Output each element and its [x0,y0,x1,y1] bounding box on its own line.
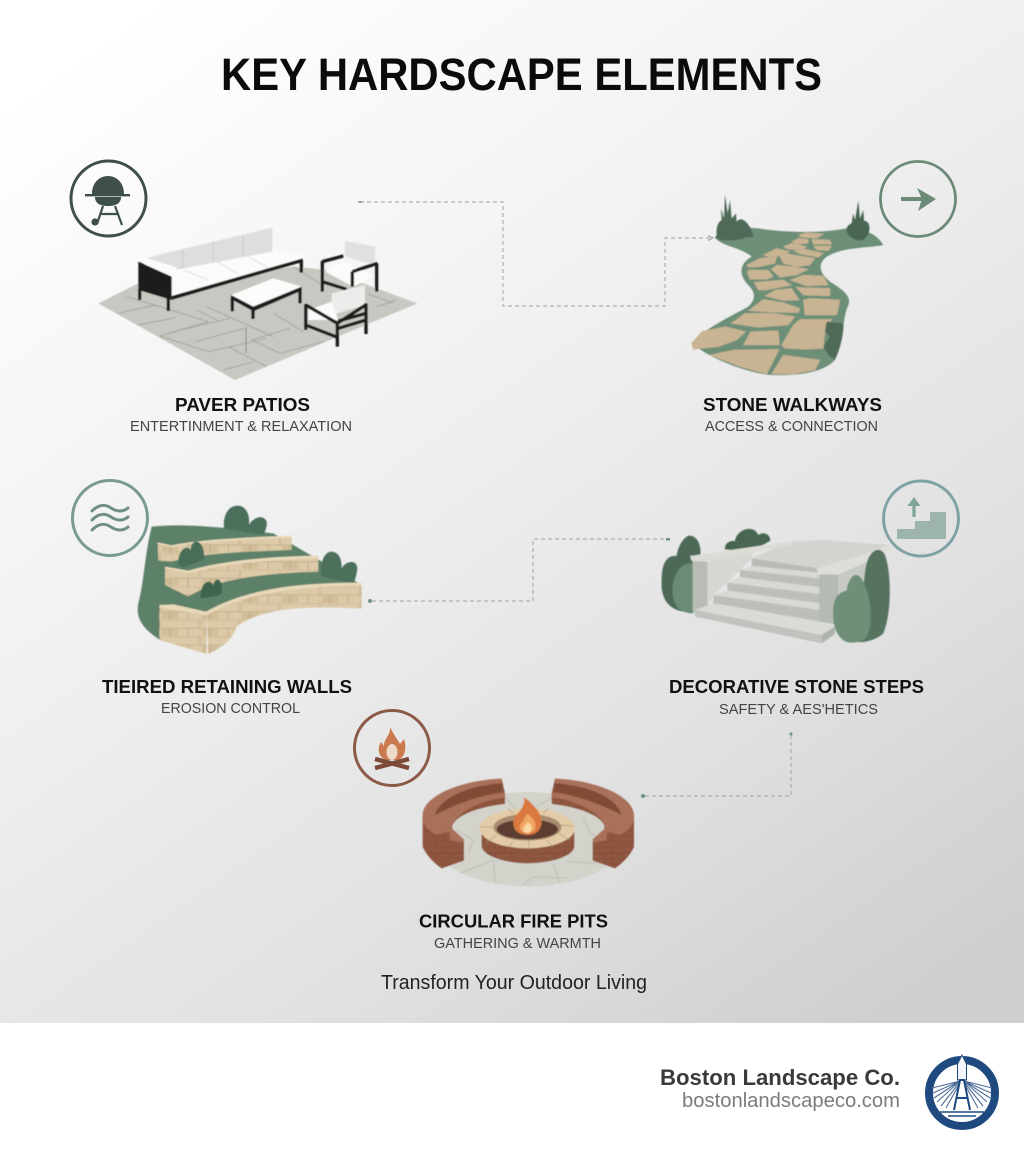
heading: retaining walls: TIEIRED RETAINING WALLS [102,676,352,697]
connector arrow: patios to walkways [358,201,713,306]
title: KEY HARDSCAPE ELEMENTS [221,49,822,100]
text: entertainment: ENTERTINMENT & RELAXATION [130,419,352,435]
sofa [145,228,272,282]
middle wall [188,557,318,597]
text: gathering: GATHERING & WARMTH [434,936,601,952]
footer panel [0,1023,1024,1154]
right pillar [819,574,838,625]
brand name: Boston Landscape Co. [660,1065,900,1090]
text: erosion control: EROSION CONTROL [161,701,300,717]
chair 2 [332,285,365,315]
panel: circular fire pits [354,710,634,952]
panel: paver patios [71,161,417,435]
icon: waves [72,480,148,556]
steps [752,558,818,573]
panel: decorative stone steps [662,481,958,718]
top wall [172,536,292,562]
heading: steps: DECORATIVE STONE STEPS [669,676,924,697]
right bench [552,779,634,868]
heading: stone walkways: STONE WALKWAYS [703,394,882,415]
brand url: bostonlandscapeco.com [682,1090,900,1112]
text: safety: SAFETY & AES'HETICS [719,702,878,718]
heading: paver patios: PAVER PATIOS [175,394,310,415]
icon: stairs with arrow [884,481,958,556]
illustration: stone steps [662,529,890,643]
landing [752,540,888,568]
chair 1 [345,241,375,265]
lower wall [207,585,362,654]
icon: arrow [880,162,956,236]
connector arrow: steps to retaining walls [368,538,670,603]
logo: bridge badge [929,1055,995,1126]
panel: tiered retaining walls [72,480,362,717]
illustration: fire pit [423,779,634,887]
fire ring [482,830,574,863]
left wall [707,551,753,608]
panel: stone walkways [692,162,956,435]
illustration: stone path [692,194,883,375]
tagline: Transform Your Outdoor Living [381,972,647,994]
heading: fire pits: CIRCULAR FIRE PITS [419,910,608,932]
connector arrow: fire pits to steps [641,732,792,798]
left bench [423,779,505,868]
icon: grill [71,161,146,236]
illustration: retaining walls [138,506,362,654]
icon: campfire [354,710,430,786]
grass tufts [717,194,753,237]
illustration: patio with furniture [98,228,417,380]
text: access: ACCESS & CONNECTION [705,419,878,435]
flame [513,797,542,835]
table [231,278,302,307]
